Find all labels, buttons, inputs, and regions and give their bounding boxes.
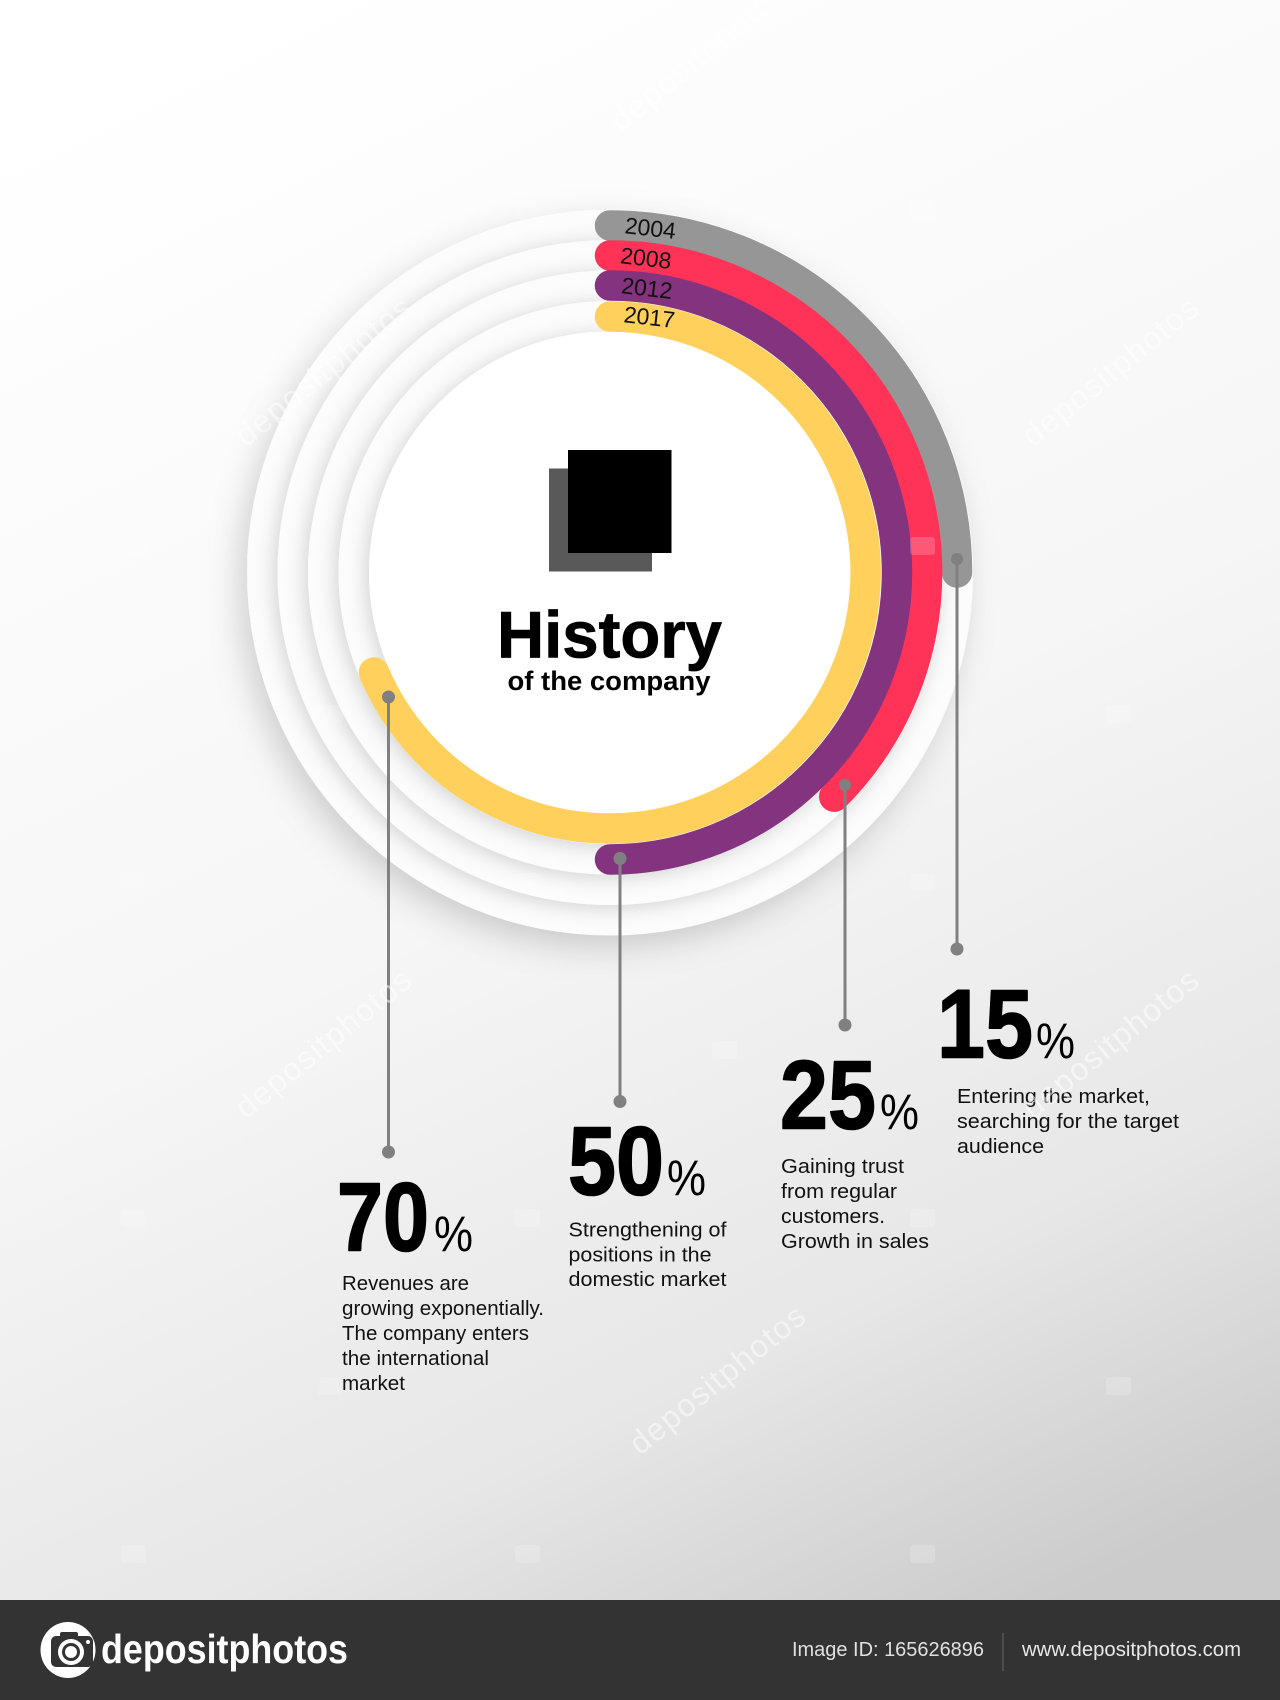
- stat: 70%: [337, 1162, 544, 1395]
- description: 70%: The company enters: [342, 1323, 529, 1345]
- description: 25%: Gaining trust: [781, 1156, 904, 1178]
- description: 50%: positions in the: [568, 1244, 712, 1266]
- year 2008: 2008: [619, 242, 673, 274]
- description: 70%: [342, 1273, 544, 1395]
- arc: 2004 gray 15%: [610, 226, 957, 572]
- arc: 2017 yellow 70%: [374, 316, 866, 828]
- description: 15%: Entering the market,: [957, 1086, 1150, 1108]
- description: 25%: [781, 1156, 929, 1253]
- description: 25%: customers.: [781, 1206, 885, 1228]
- footer bar: [0, 1600, 1280, 1700]
- description: 25%: from regular: [781, 1181, 897, 1203]
- description: 70%: market: [342, 1373, 405, 1395]
- description: 25%: Growth in sales: [781, 1231, 929, 1253]
- description: 50%: Strengthening of: [568, 1220, 727, 1242]
- year labels: [619, 212, 678, 333]
- stat: 25%: %: [880, 1084, 919, 1140]
- icon: camera logo: [40, 1622, 96, 1678]
- description: 70%: Revenues are: [342, 1273, 469, 1295]
- description: 15%: audience: [957, 1136, 1044, 1158]
- year 2004: 2004: [624, 212, 678, 244]
- title: History: [497, 598, 722, 672]
- description: 70%: the international: [342, 1348, 489, 1370]
- watermark text: depositphotos: [228, 289, 418, 453]
- arc: 2008 red 25%: [610, 255, 927, 797]
- stat: 25%: 25: [780, 1040, 876, 1150]
- description: 15%: searching for the target: [957, 1111, 1179, 1133]
- stat: 15%: %: [1036, 1013, 1075, 1069]
- stat: 15%: [937, 970, 1179, 1158]
- concentric paper rings: [247, 210, 973, 936]
- description: 50%: [568, 1220, 727, 1291]
- description: 50%: domestic market: [568, 1269, 727, 1291]
- stat: 15%: 15: [937, 970, 1033, 1078]
- stat: 70%: 70: [337, 1162, 429, 1272]
- footer url: www.depositphotos.com: [1021, 1639, 1241, 1661]
- description: 70%: growing exponentially.: [342, 1298, 544, 1320]
- stat: 50%: %: [667, 1150, 706, 1206]
- connector: 50%: [614, 852, 626, 1108]
- watermark text: depositphotos: [622, 625, 812, 789]
- stat: 50%: [568, 1106, 727, 1291]
- watermark text: [228, 0, 1205, 1461]
- watermark camera marks: [121, 33, 1131, 1563]
- footer image id: Image ID: 165626896: [792, 1639, 984, 1661]
- footer brand name: depositphotos: [101, 1626, 348, 1672]
- arc: 2012 purple 50%: [610, 286, 897, 860]
- watermark text: depositphotos: [1015, 289, 1205, 453]
- watermark text: depositphotos: [1015, 961, 1205, 1125]
- timeline arcs: [374, 226, 957, 860]
- watermark text: depositphotos: [228, 961, 418, 1125]
- watermark text: depositphotos: [622, 1297, 812, 1461]
- connector: 70%: [382, 690, 395, 1158]
- stat: 25%: [780, 1040, 929, 1253]
- connector: 15%: [950, 553, 964, 956]
- subtitle: of the company: [508, 666, 710, 696]
- connector: 25%: [838, 779, 852, 1032]
- stat: 50%: 50: [568, 1106, 664, 1216]
- description: 15%: [957, 1086, 1179, 1158]
- icon: logo placeholder squares: [549, 450, 672, 572]
- connector lines: [382, 553, 964, 1158]
- stat: 70%: %: [434, 1206, 473, 1262]
- year 2012: 2012: [620, 272, 674, 304]
- year 2017: 2017: [623, 301, 676, 333]
